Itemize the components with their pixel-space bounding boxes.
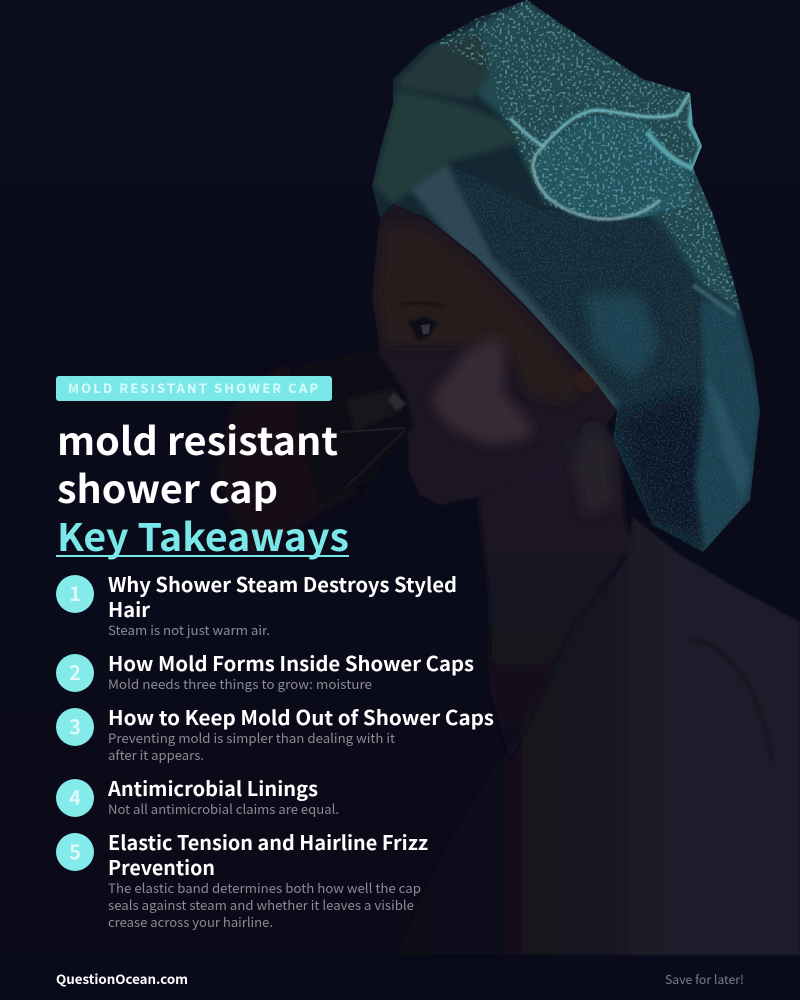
title: mold resistant (57, 411, 338, 466)
item 5 (56, 827, 428, 931)
footer bar: Save for later! (665, 971, 744, 988)
ear (574, 370, 598, 393)
tag pill: MOLD RESISTANT SHOWER CAP (68, 378, 318, 397)
item 3: after it appears. (108, 745, 204, 764)
item 2: 2 (69, 657, 81, 686)
footer bar: QuestionOcean.com (56, 969, 188, 988)
item 3: Preventing mold is simpler than dealing with it (108, 728, 395, 747)
fold edges (510, 93, 690, 146)
item 1: Why Shower Steam Destroys Styled (108, 569, 457, 598)
item 4: Not all antimicrobial claims are equal. (108, 799, 339, 818)
item 4: 4 (69, 782, 81, 811)
item 5: 5 (69, 836, 81, 865)
crest base (430, 0, 740, 310)
item 1: 1 (69, 578, 81, 607)
towel wrap (360, 0, 770, 560)
item 3: 3 (69, 711, 81, 740)
item 5: seals against steam and whether it leaves a visible (108, 895, 414, 914)
item 2: How Mold Forms Inside Shower Caps (108, 648, 474, 677)
title: Key Takeaways (57, 507, 349, 562)
hairline band (410, 164, 620, 411)
fine knit texture (440, 160, 770, 560)
inner pocket (535, 115, 690, 218)
item 2 (56, 648, 474, 693)
left folds (374, 89, 520, 204)
item 3: How to Keep Mold Out of Shower Caps (108, 702, 494, 731)
hand and glass (215, 350, 413, 560)
face (370, 204, 617, 515)
item 2: Mold needs three things to grow: moisture (108, 674, 372, 693)
inner dark (618, 390, 705, 540)
footer bar (0, 956, 800, 1000)
coarse knit texture (440, 0, 740, 310)
robe (395, 517, 800, 955)
tag pill (56, 376, 332, 401)
title (56, 411, 349, 562)
item 5: crease across your hairline. (108, 912, 273, 931)
item 1: Steam is not just warm air. (108, 620, 270, 639)
item 1 (56, 569, 457, 639)
item 5: Prevention (108, 852, 215, 881)
item 4: Antimicrobial Linings (107, 773, 318, 802)
item 3 (56, 702, 494, 764)
item 1: Hair (108, 594, 150, 623)
middle (547, 204, 694, 272)
item 5: The elastic band determines both how well the cap (108, 878, 421, 897)
item 4 (56, 773, 339, 818)
background photo: woman in towel drinking (214, 0, 800, 956)
tail (695, 300, 760, 552)
title: shower cap (57, 459, 278, 514)
item 5: Elastic Tension and Hairline Frizz (108, 827, 428, 856)
cheek highlight (430, 337, 530, 445)
neck (478, 415, 633, 760)
eye (408, 317, 438, 341)
